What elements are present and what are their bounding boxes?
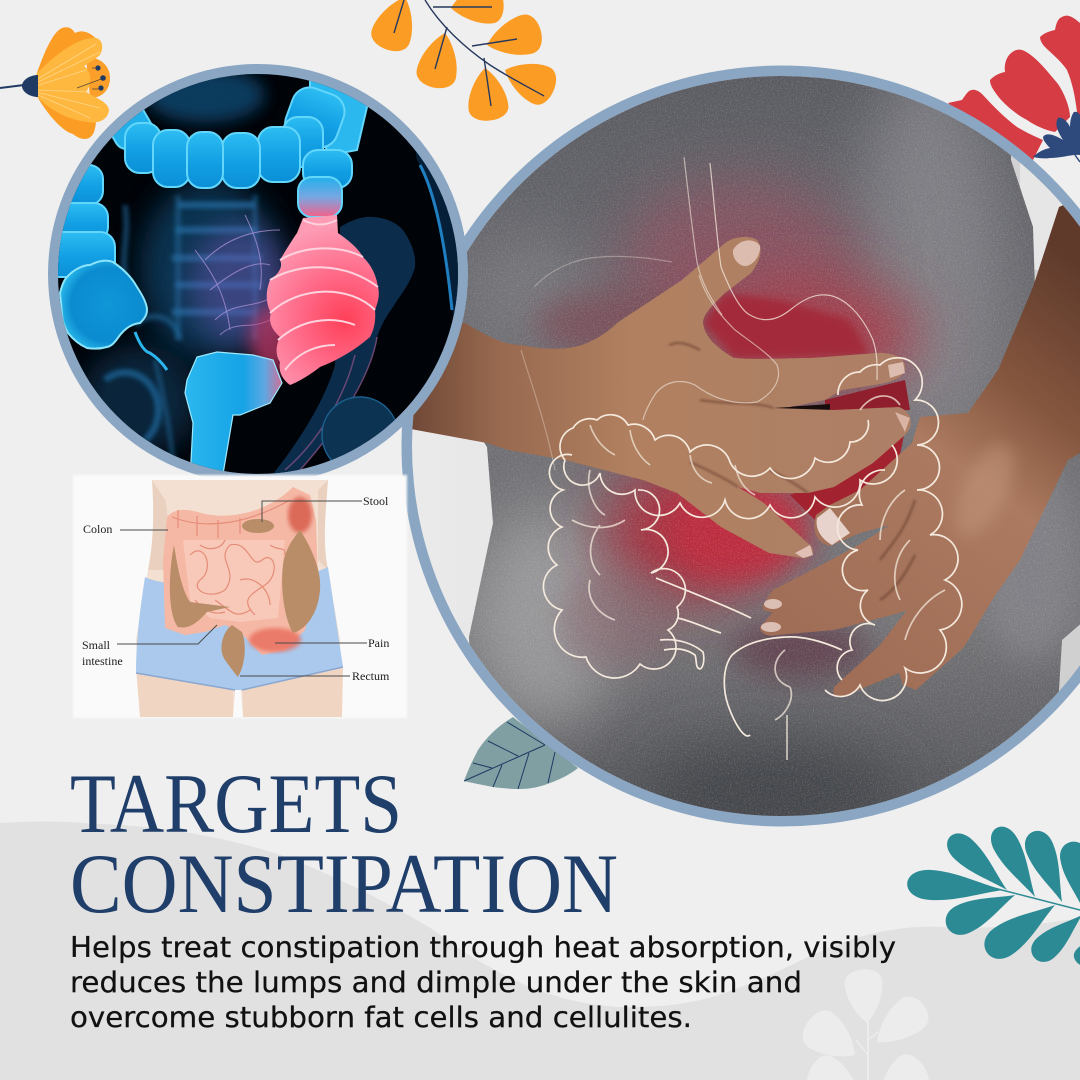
diagram labels: Rectum <box>352 669 390 683</box>
diagram labels: Stool <box>363 494 389 508</box>
panel: blue colon x-ray <box>40 60 480 490</box>
icon: orange leaf branch <box>367 0 561 122</box>
sigmoid colon <box>724 637 842 736</box>
intestines <box>163 487 318 655</box>
pink highlights <box>270 220 378 370</box>
finger nails and creases <box>669 240 915 632</box>
icon: red flower <box>948 16 1080 162</box>
intestine outline overlay <box>543 358 962 760</box>
title: CONSTIPATION <box>70 837 618 931</box>
fabric grain <box>462 76 1080 816</box>
description text <box>70 931 896 1034</box>
background hill <box>0 822 1080 1080</box>
description text: overcome stubborn fat cells and cellulites. <box>70 1001 692 1034</box>
pelvis shape <box>273 217 415 474</box>
faint skeleton <box>80 67 290 480</box>
ascending colon and appendix <box>543 454 685 678</box>
pink glow <box>250 305 294 375</box>
body <box>136 480 342 717</box>
leader lines <box>117 501 367 676</box>
diagram labels <box>82 494 390 683</box>
hand highlight <box>957 444 1016 534</box>
title <box>70 757 618 931</box>
body silhouette <box>416 151 458 316</box>
description text: reduces the lumps and dimple under the skin and <box>70 966 802 999</box>
icon: orange flower <box>0 27 110 139</box>
diagram labels: Colon <box>83 522 112 536</box>
panel: stomach pain photo <box>400 60 1080 840</box>
diagram labels: Small <box>82 638 111 652</box>
hepatic flexure and descending colon <box>825 358 962 701</box>
transverse colon <box>560 415 868 479</box>
stool shapes <box>170 519 320 677</box>
red gaps between fingers <box>703 293 910 530</box>
blue shorts <box>136 567 343 690</box>
pink bulge <box>267 215 379 385</box>
diagram labels: intestine <box>82 654 123 668</box>
faint stomach outlines <box>521 157 877 470</box>
forearm and hand left <box>405 237 911 558</box>
panel: colon diagram inset <box>73 475 407 718</box>
icon: teal leaf branch <box>906 822 1080 971</box>
diagram labels: Pain <box>368 636 389 650</box>
title: TARGETS <box>70 757 402 851</box>
blue colon segments <box>45 80 367 480</box>
icon: muted teal leaf <box>464 717 578 789</box>
red heat glow <box>620 180 860 350</box>
forearm and hand right <box>760 195 1080 697</box>
description text: Helps treat constipation through heat absorption, visibly <box>70 931 896 964</box>
shirt <box>462 76 1080 816</box>
faint white plant <box>796 968 935 1080</box>
